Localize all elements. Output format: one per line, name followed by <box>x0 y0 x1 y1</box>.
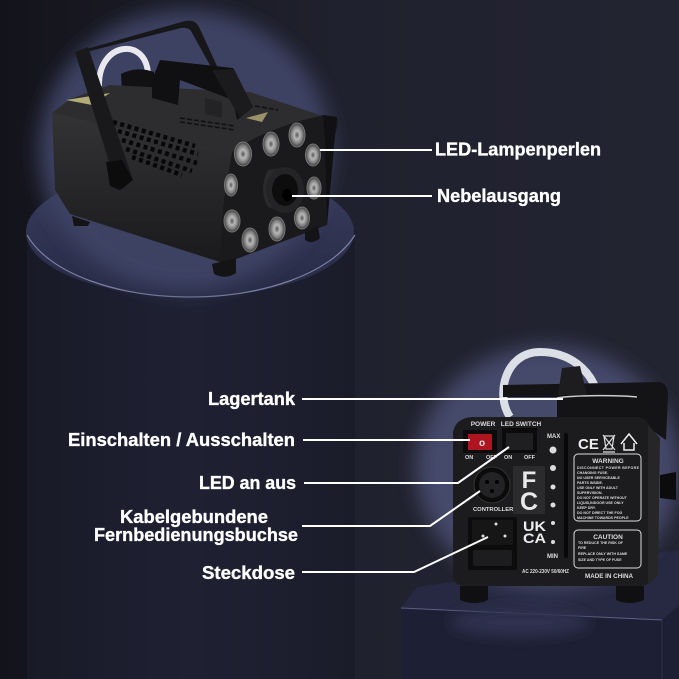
caution label: FIRE <box>578 546 587 550</box>
FC logo: F <box>522 467 536 494</box>
panel labels: ON <box>504 455 512 461</box>
top plate <box>52 85 320 155</box>
warning label: KEEP DRY. <box>577 506 596 510</box>
warning label: SUPERVISION. <box>577 491 602 495</box>
power inlet <box>468 517 517 570</box>
label: Steckdose: Steckdose <box>202 562 295 583</box>
panel labels: MAX <box>547 434 560 440</box>
knob <box>660 472 676 500</box>
spotlight: bottom <box>416 346 679 590</box>
power switch: o <box>479 438 485 449</box>
panel labels: OFF <box>486 455 498 461</box>
FC logo <box>513 466 545 516</box>
LEDs <box>224 123 321 252</box>
certification marks: CE <box>578 436 599 453</box>
warning label: DO NOT DIRECT THE FOG <box>577 511 623 515</box>
hose <box>99 49 148 86</box>
panel labels: AC 220-230V 50/60HZ <box>522 569 570 575</box>
hose <box>503 352 597 417</box>
top pedestal <box>26 167 355 679</box>
caution label: SIZE AND TYPE OF FUSE <box>578 558 622 562</box>
panel labels <box>465 421 633 580</box>
tank cap <box>121 69 155 92</box>
caution label: REPLACE ONLY WITH SAME <box>578 552 628 556</box>
warning label: DO NOT OPERATE WITHOUT <box>577 496 628 500</box>
body <box>453 417 652 586</box>
warning label: PARTS INSIDE. <box>577 481 603 485</box>
caution label: CAUTION <box>593 534 623 541</box>
UKCA mark: CA <box>523 530 546 546</box>
knob <box>106 160 133 190</box>
UKCA mark <box>523 518 546 546</box>
level indicator <box>550 433 568 558</box>
machine: bottom <box>453 352 676 603</box>
fog outlet <box>263 167 304 213</box>
bottom pedestal <box>401 550 679 679</box>
label: LED-Lampenperlen: LED-Lampenperlen <box>435 138 601 160</box>
panel labels: MIN <box>547 554 558 560</box>
warning label: DISCONNECT POWER BEFORE <box>577 466 640 470</box>
label: Kabelgebundene Fernbedienungsbuchse: Kabelgebundene <box>120 506 268 527</box>
warning label: NO USER SERVICEABLE <box>577 476 620 480</box>
warning label: USE ONLY WITH ADULT <box>577 486 619 490</box>
panel labels: CONTROLLER <box>473 507 514 513</box>
front bracket <box>75 47 133 189</box>
UKCA mark: UK <box>523 518 546 534</box>
top vents <box>180 106 278 130</box>
label: Nebelausgang: Nebelausgang <box>437 185 561 206</box>
panel labels: POWER <box>471 421 496 428</box>
feet <box>460 586 644 603</box>
LED switch <box>502 428 537 453</box>
label: Einschalten / Ausschalten: Einschalten / Ausschalten <box>68 429 295 450</box>
power switch <box>463 430 497 453</box>
side panel <box>52 113 232 263</box>
caution label: TO REDUCE THE RISK OF <box>578 541 624 545</box>
FC logo: C <box>520 488 538 516</box>
caution label <box>574 530 641 568</box>
label: Lagertank: Lagertank <box>208 388 296 409</box>
panel labels: OFF <box>524 455 536 461</box>
vent holes <box>113 122 198 175</box>
label: Kabelgebundene Fernbedienungsbuchse: Fernbedienungsbuchse <box>94 524 298 545</box>
feet <box>72 216 320 277</box>
leader lines <box>292 150 563 572</box>
panel labels: MADE IN CHINA <box>585 573 633 580</box>
label: LED an aus: LED an aus <box>199 472 296 493</box>
warning label: LIQUID,INDOOR USE ONLY <box>577 501 624 505</box>
warning label: CHANGING FUSE. <box>577 471 608 475</box>
machine: top <box>52 21 338 277</box>
warning label <box>574 454 641 521</box>
warning label: MACHINE TOWARDS PEOPLE <box>577 516 629 520</box>
certification marks <box>578 434 637 453</box>
front panel <box>221 115 338 264</box>
XLR socket <box>474 467 510 503</box>
warning label: WARNING <box>592 458 624 465</box>
tank <box>557 396 637 418</box>
spotlight: top <box>39 10 331 290</box>
label: Kabelgebundene Fernbedienungsbuchse <box>94 506 298 545</box>
panel labels: ON <box>465 455 473 461</box>
panel labels: LED SWITCH <box>501 421 542 428</box>
rear handle bracket <box>76 21 217 67</box>
rear bracket <box>503 382 668 440</box>
carry handle <box>152 60 253 120</box>
